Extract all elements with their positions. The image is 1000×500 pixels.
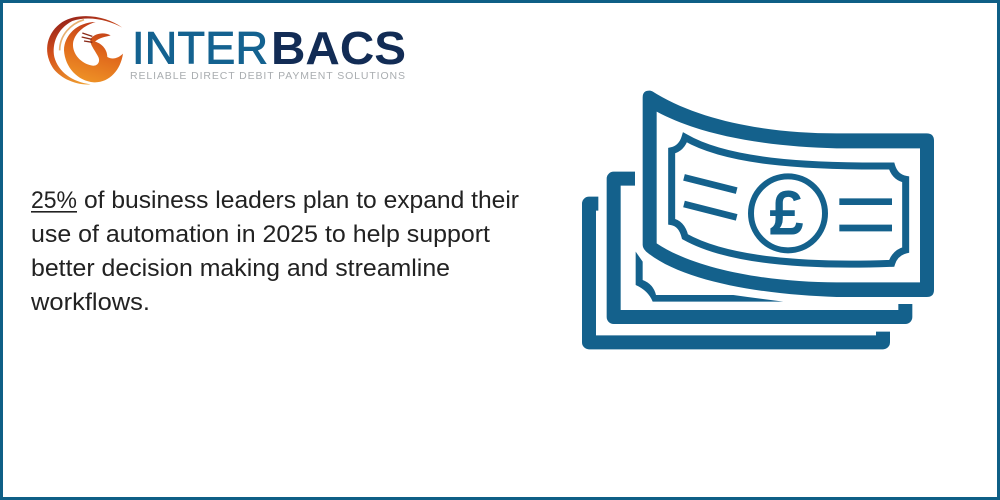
wordmark: BACS: BACS — [271, 22, 406, 74]
front note — [643, 91, 934, 297]
line 1 with underlined 25%: 25% — [31, 187, 77, 214]
note inner ornate frame — [672, 137, 906, 264]
icon: stack of pound banknotes — [582, 90, 934, 350]
icon: phoenix swirl — [47, 16, 123, 84]
pound coin: £ — [769, 179, 803, 246]
line 4: workflows. — [30, 289, 150, 316]
line 3: better decision making and streamline — [31, 255, 450, 282]
pound coin — [751, 176, 825, 250]
line 2: use of automation in 2025 to help support — [31, 221, 490, 248]
tagline: RELIABLE DIRECT DEBIT PAYMENT SOLUTIONS — [130, 70, 405, 82]
line 1 with underlined 25%: of business leaders plan to expand their — [84, 187, 519, 214]
statistic text block — [30, 187, 519, 316]
note text lines — [684, 177, 892, 228]
middle note — [614, 179, 905, 317]
logo: Interbacs — [47, 16, 406, 84]
wordmark: INTER: INTER — [132, 22, 268, 74]
back note — [589, 204, 883, 342]
